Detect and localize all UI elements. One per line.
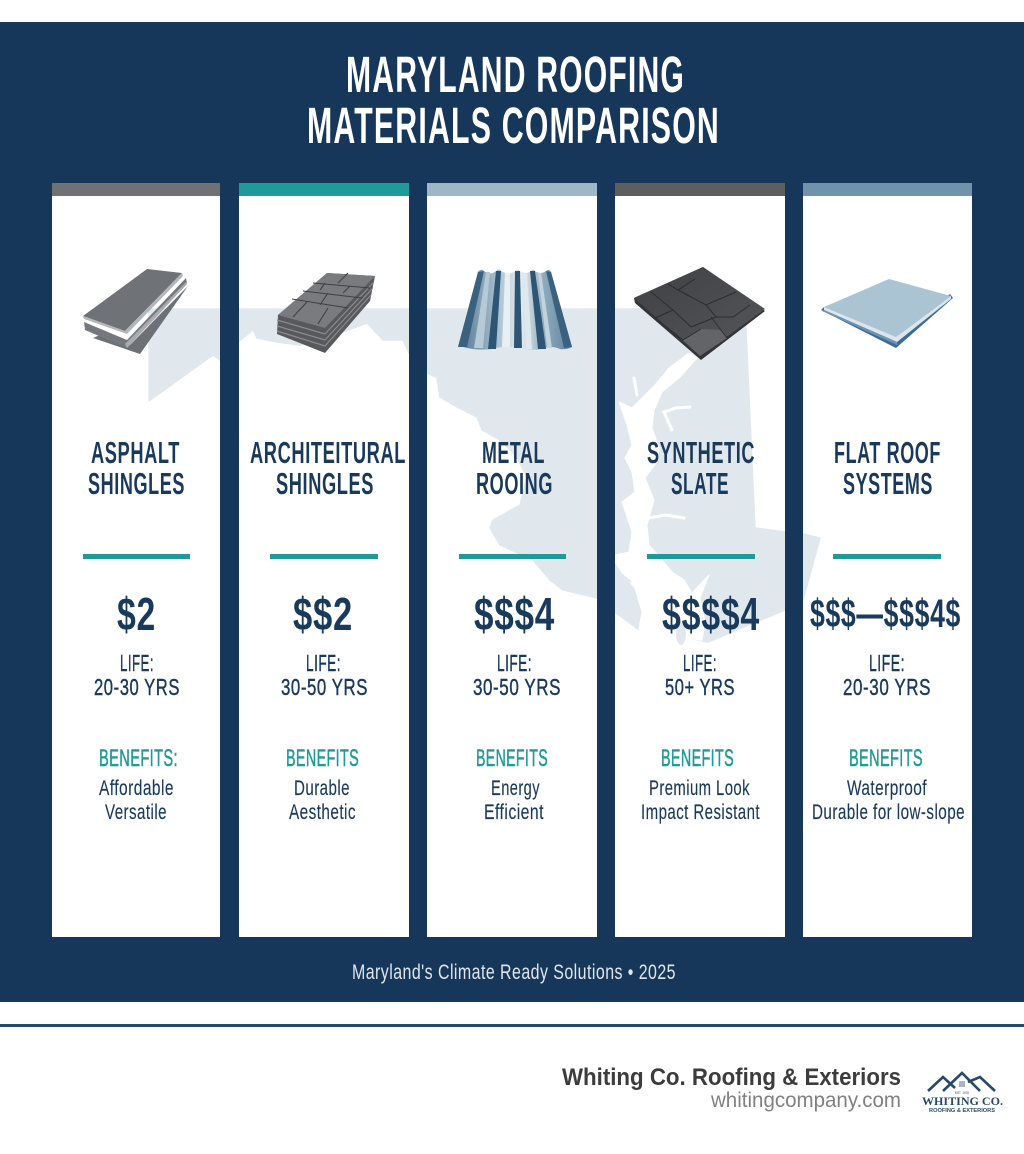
card: asphalt shingles: Versatile [105,801,167,824]
Maryland map watermark [149,309,820,645]
card: metal roofing: BENEFITS [476,745,548,772]
icon: synthetic slate [634,267,765,360]
card: flat roof systems: FLAT ROOF [834,435,941,470]
card: synthetic slate: LIFE: [683,650,717,676]
card: synthetic slate: SLATE [671,466,729,501]
card: synthetic slate [641,435,760,824]
card: flat roof systems: BENEFITS [849,745,923,772]
card: flat roof systems: Durable for low-slope [812,801,965,824]
title [307,46,720,154]
card: asphalt shingles: BENEFITS: [99,745,178,772]
card: metal roofing: ROOING [476,466,553,501]
company name: Whiting Co. Roofing & Exteriors [562,1064,901,1091]
card: flat roof systems: SYSTEMS [843,466,933,501]
title: MATERIALS COMPARISON [307,97,720,154]
card: asphalt shingles: 20-30 YRS [94,674,180,700]
card: synthetic slate: 50+ YRS [665,674,735,700]
card: architectural shingles: LIFE: [306,650,341,676]
logo: Whiting Co. [922,1073,1003,1114]
logo: Whiting Co.: ROOFING & EXTERIORS [929,1108,995,1114]
card: architectural shingles: Durable [294,777,350,800]
card: architectural shingles [250,435,406,824]
card: flat roof systems: 20-30 YRS [843,674,931,700]
card: flat roof systems: LIFE: [869,650,905,676]
card: synthetic slate: SYNTHETIC [647,435,755,470]
card: synthetic slate: BENEFITS [661,745,734,772]
icon: flat roof [821,279,953,348]
card: asphalt shingles: LIFE: [120,650,154,676]
card: metal roofing: METAL [482,435,545,470]
card: metal roofing [459,435,566,824]
card: architectural shingles: BENEFITS [286,745,359,772]
card: architectural shingles: Aesthetic [289,801,356,824]
card: architectural shingles: ARCHITEITURAL [250,435,406,470]
card: architectural shingles: $$2 [293,588,353,640]
title: MARYLAND ROOFING [346,46,685,103]
card: architectural shingles: 30-50 YRS [281,674,368,700]
panel footer caption: Maryland's Climate Ready Solutions • 2025 [352,961,676,984]
panel: card backgrounds [52,183,972,937]
card: synthetic slate: $$$$4 [662,588,760,640]
footer divider [0,1024,1024,1027]
card: metal roofing: LIFE: [497,650,532,676]
card: flat roof systems: Waterproof [847,777,927,800]
card: flat roof systems [810,435,965,824]
icon: metal roofing [458,270,572,350]
card: architectural shingles: SHINGLES [276,466,374,501]
card: asphalt shingles: $2 [117,588,156,640]
card: metal roofing: Energy [491,777,540,800]
card: asphalt shingles: ASPHALT [91,435,180,470]
card: metal roofing: 30-50 YRS [473,674,561,700]
card: asphalt shingles [83,435,190,824]
card: synthetic slate: Premium Look [649,777,750,800]
card: synthetic slate: Impact Resistant [641,801,760,824]
logo: Whiting Co.: EST. 1976 [955,1091,969,1095]
card: metal roofing: $$$4 [474,588,555,640]
card: asphalt shingles: Affordable [99,777,174,800]
island [676,623,686,645]
company website: whitingcompany.com [710,1089,901,1112]
icon: architectural shingles [277,273,375,353]
card: asphalt shingles: SHINGLES [88,466,185,501]
card: metal roofing: Efficient [484,801,544,824]
logo: Whiting Co.: WHITING CO. [922,1094,1003,1108]
icon: asphalt shingles [83,269,188,354]
